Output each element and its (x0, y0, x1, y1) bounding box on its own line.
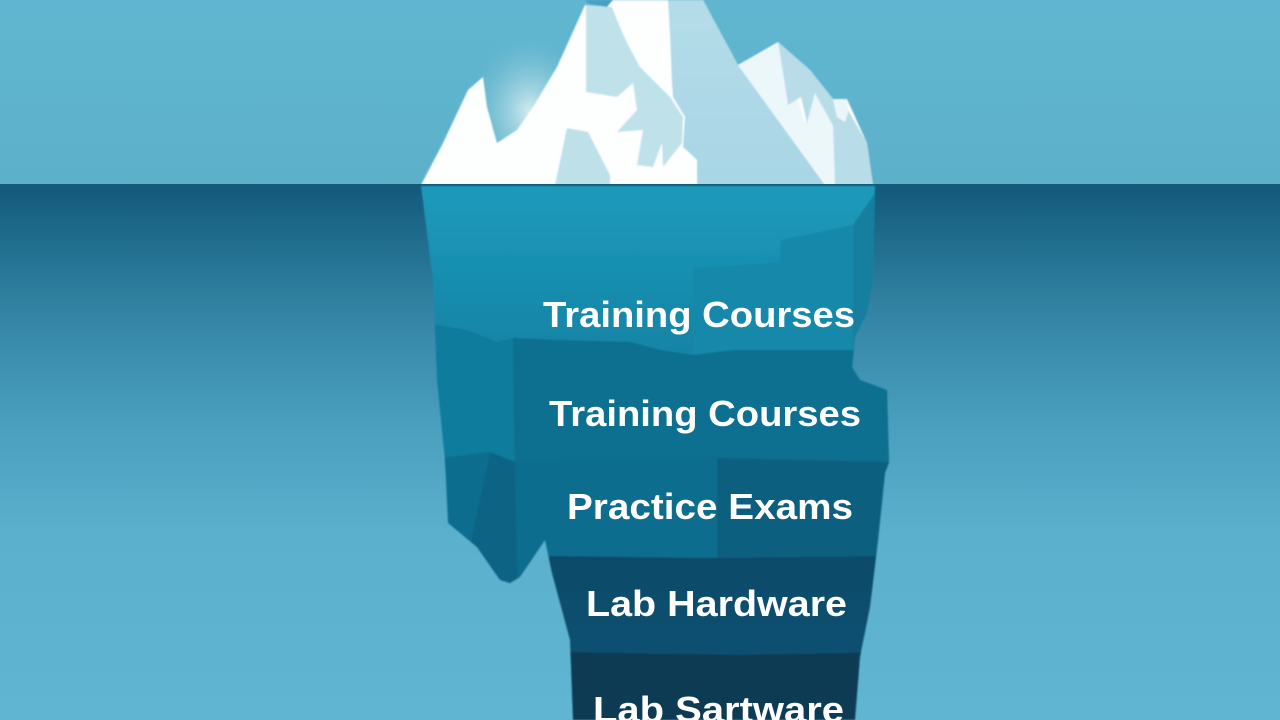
label: lab hardware: Lab Hardware (586, 583, 847, 624)
water notch at summit (585, 0, 613, 7)
lower shaded face (555, 128, 610, 185)
iceberg tip above water (421, 0, 873, 185)
label: training courses 1: Training Courses (543, 294, 855, 335)
glow behind iceberg peak (462, 30, 598, 194)
waterline (0, 184, 1280, 186)
layer 2 shaded facet (513, 338, 895, 470)
layer 3 left shade (472, 453, 517, 583)
far right peak highlight (833, 99, 848, 122)
layer 2 (425, 323, 895, 470)
layer 4 (549, 556, 895, 655)
sea background (0, 185, 1280, 720)
large shaded face (668, 0, 825, 185)
layer 3 right shade (717, 458, 895, 558)
label: training courses 2: Training Courses (549, 393, 861, 434)
right face light shade (738, 42, 835, 185)
layer 1 (415, 186, 885, 366)
left upper shaded face (586, 5, 683, 167)
layer 5 (570, 652, 862, 720)
layer 1 right strip (854, 196, 874, 342)
sky background (0, 0, 1280, 186)
layer 1 shaded facets (697, 226, 852, 354)
white ice silhouette (421, 0, 873, 185)
label: practice exams: Practice Exams (567, 486, 853, 527)
layer 3 (444, 452, 718, 579)
iceberg underwater body (415, 186, 895, 720)
far right shaded face (778, 42, 873, 185)
